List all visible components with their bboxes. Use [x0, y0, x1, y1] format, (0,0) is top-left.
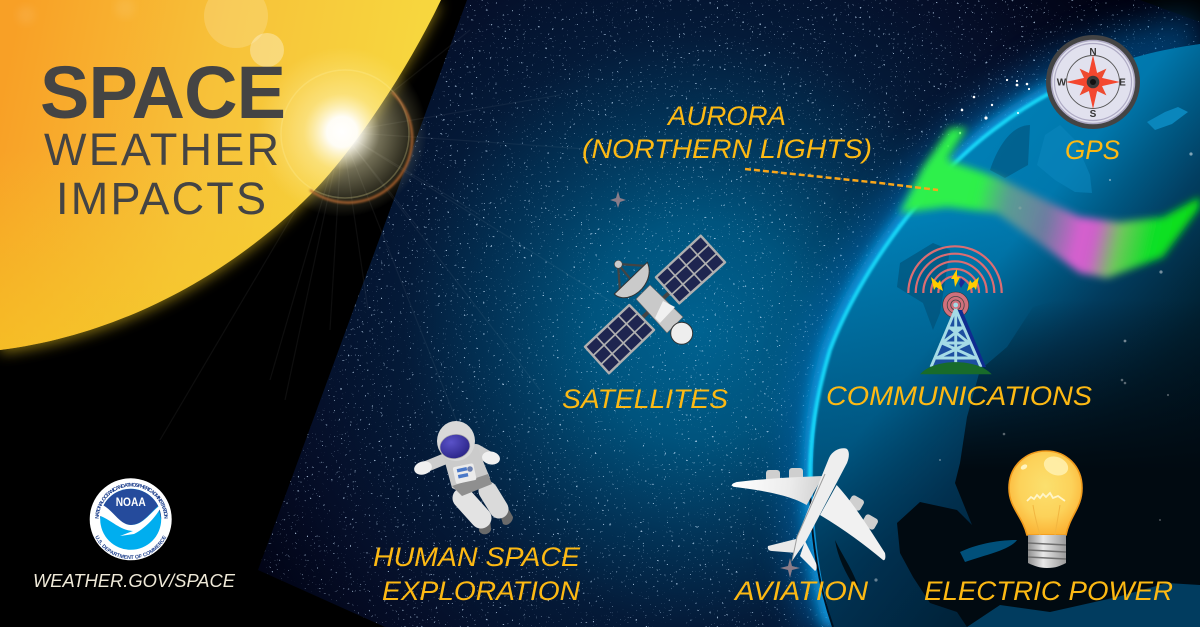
- boots: [479, 515, 491, 534]
- icon: gps compass: N: [1089, 47, 1097, 58]
- label: electric power: ELECTRIC POWER: [924, 576, 1173, 606]
- torso: [443, 444, 490, 493]
- land: cuba: [960, 540, 1017, 562]
- helmet: [437, 421, 475, 461]
- stars near the horizon: [874, 79, 1193, 582]
- satellite body: [636, 285, 683, 333]
- title word: weather: WEATHER: [44, 124, 279, 175]
- solar rays: [160, 30, 640, 480]
- dashed leader line: [745, 169, 938, 190]
- icon: airplane: [732, 448, 885, 571]
- icon: astronaut: [413, 421, 513, 534]
- icon: light bulb: [1009, 451, 1082, 568]
- filament: [1027, 493, 1065, 501]
- ring text: U.S. DEPARTMENT OF COMMERCE: [96, 535, 166, 559]
- land: arctic islands: [990, 125, 1030, 178]
- solar panel lower: [585, 305, 654, 373]
- ring text: NATIONAL OCEANIC AND ATMOSPHERIC ADMINISTRATION: [95, 482, 168, 518]
- label: gps: GPS: [1065, 135, 1120, 165]
- label: aurora: AURORA: [666, 101, 786, 131]
- lightning bolts: [931, 269, 979, 291]
- atmosphere glow: [813, 44, 1200, 627]
- label: human space exploration: [373, 542, 581, 606]
- wings: [732, 476, 823, 505]
- title: [40, 51, 286, 224]
- ring text: [95, 482, 168, 559]
- label: human space exploration: HUMAN SPACE: [373, 542, 581, 572]
- dark ocean and gulf: [897, 297, 1200, 627]
- label: aurora: [582, 101, 872, 164]
- noaa wordmark: NOAA: [116, 497, 146, 509]
- panel: starfield wedge: [250, 0, 1200, 627]
- land: baja dark: [835, 540, 858, 588]
- icon: gps compass: S: [1090, 109, 1097, 120]
- tail: [768, 538, 800, 553]
- icon: communications tower: [908, 246, 1002, 374]
- panel: sun: [0, 0, 441, 350]
- icon: gps compass: E: [1119, 78, 1126, 88]
- sphere: [671, 322, 693, 344]
- screw base: [1028, 535, 1066, 568]
- dish: [614, 262, 649, 298]
- icon: gps compass: W: [1057, 78, 1067, 88]
- panel: globe: [810, 44, 1200, 627]
- title word: space: SPACE: [40, 51, 286, 134]
- label: aurora: (NORTHERN LIGHTS): [582, 134, 872, 164]
- url: WEATHER.GOV/SPACE: [33, 570, 236, 591]
- label: human space exploration: EXPLORATION: [382, 576, 581, 606]
- icon: gps compass: [1046, 35, 1140, 129]
- sun edge glow: [0, 3, 441, 353]
- title word: impacts: IMPACTS: [56, 173, 266, 224]
- label: aviation: AVIATION: [733, 576, 869, 606]
- label: communications: COMMUNICATIONS: [826, 381, 1092, 411]
- land: south america: [967, 583, 1200, 627]
- antenna feed: [618, 264, 647, 291]
- sun flare with ring: [257, 47, 427, 217]
- label: satellites: SATELLITES: [562, 384, 728, 414]
- arms: [425, 458, 447, 467]
- land: greenland: [1044, 136, 1092, 193]
- logo: noaa: [90, 478, 172, 560]
- solar panel upper: [656, 236, 725, 303]
- chest pack: [453, 463, 477, 484]
- icon: four point stars: [610, 191, 800, 578]
- land: iceland: [1147, 107, 1188, 130]
- land: hudson bay: [897, 243, 950, 330]
- aurora (northern lights): [900, 128, 1200, 278]
- engines: [766, 468, 879, 531]
- fuselage: [792, 448, 849, 561]
- legs: [463, 498, 481, 518]
- icon: satellite: [585, 236, 725, 373]
